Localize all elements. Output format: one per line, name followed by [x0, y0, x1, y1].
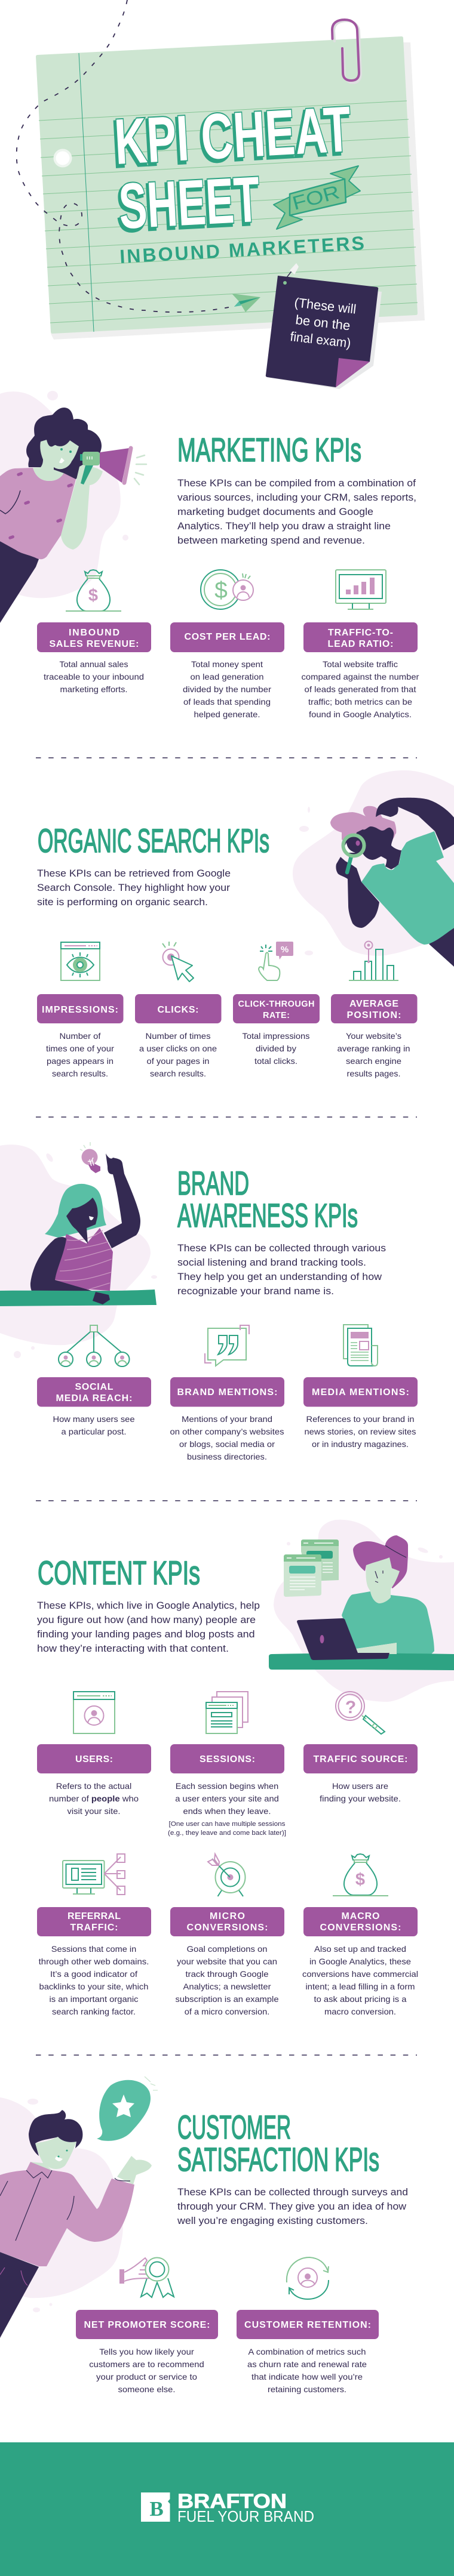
intro text: Analytics. They’ll help you draw a straight line	[177, 520, 391, 532]
description: Total impressions	[243, 1031, 309, 1041]
description: How users are	[332, 1781, 388, 1791]
label	[237, 2310, 379, 2339]
description: visit your site.	[67, 1806, 121, 1816]
description: A combination of metrics such	[249, 2347, 366, 2356]
label	[170, 622, 284, 652]
subtitle: INBOUND MARKETERS: INBOUND MARKETERS	[119, 232, 365, 267]
description: pages appears in	[47, 1056, 114, 1066]
description: a particular post.	[61, 1427, 127, 1436]
paper plane	[232, 294, 260, 312]
paper sheet	[36, 36, 418, 334]
intro text: you figure out how (and how many) people are	[37, 1614, 256, 1625]
intro text: between marketing spend and revenue.	[177, 535, 365, 546]
description: helped generate.	[194, 709, 260, 719]
description: is an important organic	[49, 1994, 139, 2004]
kpi: media mentions	[303, 1325, 418, 1449]
note text	[289, 295, 357, 351]
intro text	[37, 1600, 260, 1654]
intro text: These KPIs can be collected through various	[177, 1242, 386, 1254]
paper shadow	[51, 42, 425, 340]
description: Goal completions on	[186, 1944, 268, 1954]
label: TRAFFIC:	[70, 1923, 118, 1933]
label: SOCIAL	[75, 1382, 114, 1392]
label	[233, 994, 320, 1023]
description: total clicks.	[254, 1056, 297, 1066]
title: KPI CHEAT	[111, 92, 353, 180]
description: Your website’s	[346, 1031, 401, 1041]
description: customers are to recommend	[89, 2359, 204, 2369]
description: Total website traffic	[323, 659, 398, 669]
kpi: users	[37, 1692, 151, 1816]
icon: coin and person: $	[214, 578, 228, 603]
punched hole	[54, 149, 72, 167]
description: search ranking factor.	[52, 2007, 136, 2016]
icon: money bag: $	[355, 1870, 365, 1889]
heading	[177, 1164, 358, 1234]
icon: target with arrow	[208, 1854, 245, 1896]
description	[89, 2347, 204, 2394]
description: retaining customers.	[268, 2384, 346, 2394]
intro text: various sources, including your CRM, sales reports,	[177, 492, 416, 503]
description: ends when they leave.	[183, 1806, 271, 1816]
description	[46, 1031, 114, 1078]
label: COST PER LEAD:	[184, 632, 270, 642]
speech bubble with star	[97, 2077, 158, 2141]
paperclip	[332, 20, 361, 83]
intro text: These KPIs can be collected through surveys and	[177, 2186, 408, 2198]
label	[170, 1744, 284, 1773]
description: search engine	[346, 1056, 401, 1066]
description: compared against the number	[301, 672, 419, 681]
panel: organic search KPIs	[37, 770, 454, 1078]
kpi: sessions	[168, 1692, 286, 1837]
label: MICRO	[210, 1911, 245, 1921]
label	[303, 622, 418, 652]
icon: money bag	[66, 570, 121, 611]
intro text: These KPIs can be compiled from a combination of	[177, 477, 416, 489]
ribbon: FOR	[274, 166, 360, 229]
description: Also set up and tracked	[314, 1944, 406, 1954]
kpi: impressions	[37, 942, 123, 1078]
description	[176, 1944, 279, 2016]
description: subscription is an example	[176, 1994, 279, 2004]
illustration: woman raising hand with light bulb	[0, 1142, 157, 1358]
icon: newspaper	[343, 1325, 378, 1366]
footer	[0, 2442, 454, 2576]
intro text: They help you get an understanding of how	[177, 1271, 382, 1282]
sticky note	[266, 263, 382, 389]
description: through other web domains.	[39, 1957, 149, 1966]
intro text	[37, 868, 231, 908]
icon: user with circular arrows	[287, 2257, 329, 2299]
kpi: brand mentions	[170, 1325, 284, 1461]
intro text: finding your landing pages and blog posts and	[37, 1628, 254, 1640]
description: found in Google Analytics.	[309, 709, 412, 719]
icon: browser with user	[73, 1692, 115, 1733]
description: It’s a good indicator of	[50, 1969, 137, 1979]
description: backlinks to your site, which	[39, 1982, 148, 1991]
kpi: traffic-to-lead ratio	[301, 570, 419, 719]
description: on lead generation	[190, 672, 264, 681]
title: SHEET: SHEET	[117, 163, 262, 242]
kpi: customer retention	[237, 2257, 379, 2394]
description: divided by	[256, 1044, 296, 1053]
label: SALES REVENUE:	[49, 639, 139, 649]
description	[302, 1944, 418, 2016]
description: search results.	[150, 1069, 206, 1078]
description: traffic; both metrics can be	[308, 697, 412, 707]
description: of leads generated from that	[305, 684, 416, 694]
description: marketing efforts.	[60, 684, 128, 694]
description: to ask about pricing is a	[314, 1994, 407, 2004]
intro text: site is performing on organic search.	[37, 896, 208, 908]
kpi: traffic source	[303, 1692, 418, 1803]
kpi: micro conversions	[170, 1854, 284, 2016]
description: or in industry magazines.	[312, 1439, 409, 1449]
heading	[177, 2108, 379, 2178]
description: Mentions of your brand	[182, 1414, 272, 1424]
panel: brand awareness KPIs	[0, 1142, 418, 1461]
description	[175, 1781, 279, 1816]
description: a user enters your site and	[175, 1794, 279, 1803]
description	[247, 2347, 367, 2394]
title: SHEET: SHEET	[115, 165, 260, 245]
illustration: woman with megaphone	[0, 391, 146, 623]
intro text	[177, 1242, 386, 1297]
description	[170, 1414, 284, 1461]
description: How many users see	[53, 1414, 135, 1424]
description: as churn rate and renewal rate	[247, 2359, 367, 2369]
description	[301, 659, 419, 719]
intro text	[177, 2186, 408, 2226]
label	[303, 1377, 418, 1407]
description: Analytics; a newsletter	[183, 1982, 271, 1991]
description: References to your brand in	[306, 1414, 415, 1424]
heading: ORGANIC SEARCH KPIs	[38, 822, 269, 859]
label: CLICK-THROUGH	[238, 999, 314, 1009]
intro text: how they’re interacting with that content.	[37, 1643, 229, 1654]
note text: final exam)	[289, 329, 352, 351]
description: traceable to your inbound	[44, 672, 144, 681]
kpi: net promoter score	[76, 2258, 218, 2394]
intro text	[177, 477, 416, 546]
intro text: These KPIs can be retrieved from Google	[37, 868, 231, 879]
description	[320, 1781, 401, 1803]
icon: network of users	[59, 1325, 129, 1366]
kpi: click-through rate	[233, 942, 320, 1066]
label	[37, 622, 151, 652]
heading: MARKETING KPIs	[177, 431, 361, 468]
intro text: social listening and brand tracking tools.	[177, 1257, 366, 1268]
label: REFERRAL	[68, 1911, 121, 1921]
description	[337, 1031, 410, 1078]
wordmark: FUEL YOUR BRAND	[177, 2507, 314, 2525]
description: number of people who	[49, 1794, 139, 1803]
description	[39, 1944, 149, 2016]
description: or blogs, social media or	[179, 1439, 275, 1449]
description: Number of	[60, 1031, 101, 1041]
illustration: woman at laptop	[269, 1520, 454, 1702]
label: CONVERSIONS:	[186, 1923, 268, 1933]
ruled lines	[39, 101, 418, 323]
description	[305, 1414, 416, 1449]
panel: hero notebook paper	[17, 0, 425, 389]
intro text: through your CRM. They give you an idea of how	[177, 2201, 407, 2212]
kpi: macro conversions	[302, 1854, 418, 2016]
description: macro conversion.	[324, 2007, 396, 2016]
icon: stacked pages	[206, 1692, 248, 1733]
description: Refers to the actual	[56, 1781, 131, 1791]
pin	[283, 263, 299, 285]
intro text: recognizable your brand name is.	[177, 1285, 334, 1297]
illustration: person with magnifying glass	[293, 770, 454, 967]
description: results pages.	[346, 1069, 400, 1078]
description: someone else.	[118, 2384, 176, 2394]
heading: CONTENT KPIs	[38, 1554, 200, 1591]
label	[37, 1907, 151, 1936]
label: TRAFFIC SOURCE:	[313, 1754, 407, 1764]
label: BRAND MENTIONS:	[177, 1387, 277, 1397]
label: RATE:	[263, 1011, 290, 1020]
description: Total annual sales	[60, 659, 128, 669]
description: conversions have commercial	[302, 1969, 418, 1979]
panel: marketing KPIs	[0, 391, 419, 719]
description: of your pages in	[147, 1056, 209, 1066]
wordmark: BRAFTON	[177, 2490, 287, 2513]
label: AVERAGE	[349, 999, 398, 1009]
description: of a micro conversion.	[185, 2007, 269, 2016]
note text: be on the	[295, 312, 351, 333]
intro text: well you’re engaging existing customers.	[177, 2215, 368, 2226]
label	[76, 2310, 218, 2339]
icon: money bag: $	[88, 586, 98, 605]
icon: bar chart with pin	[349, 942, 398, 980]
panel: content KPIs	[37, 1520, 454, 2016]
description: Sessions that come in	[51, 1944, 136, 1954]
description: search results.	[52, 1069, 108, 1078]
description	[53, 1414, 135, 1436]
kpi: social media reach	[37, 1325, 151, 1436]
dashed flight path	[17, 0, 229, 312]
description	[183, 659, 271, 719]
kpi: inbound sales revenue	[37, 570, 151, 694]
heading: CUSTOMER	[177, 2108, 291, 2146]
description: a user clicks on one	[139, 1044, 217, 1053]
label: USERS:	[75, 1754, 113, 1764]
label: INBOUND	[69, 628, 119, 638]
label: LEAD RATIO:	[327, 639, 393, 649]
icon: hand holding medal ribbon	[119, 2258, 174, 2297]
description: in Google Analytics, these	[309, 1957, 411, 1966]
label: MACRO	[342, 1911, 380, 1921]
icon: monitor with bars	[336, 570, 386, 609]
label: POSITION:	[346, 1010, 401, 1020]
description: your website that you can	[177, 1957, 277, 1966]
label: MEDIA REACH:	[56, 1393, 133, 1403]
label: CONVERSIONS:	[320, 1923, 401, 1933]
label	[37, 994, 123, 1023]
intro text: Search Console. They highlight how your	[37, 882, 230, 893]
description: Total money spent	[191, 659, 263, 669]
label: SESSIONS:	[200, 1754, 255, 1764]
icon: coin and person	[201, 570, 253, 609]
web pages	[284, 1540, 339, 1597]
description: times one of your	[46, 1044, 114, 1053]
label: CUSTOMER RETENTION:	[244, 2320, 371, 2330]
icon: magnifying glass with question mark	[336, 1692, 385, 1734]
kpi: clicks	[135, 942, 221, 1078]
description	[139, 1031, 217, 1078]
description	[49, 1781, 139, 1816]
label	[303, 1744, 418, 1773]
label: TRAFFIC-TO-	[328, 628, 393, 638]
margin line	[79, 53, 94, 332]
label: MEDIA MENTIONS:	[312, 1387, 409, 1397]
label: NET PROMOTER SCORE:	[84, 2320, 210, 2330]
description: track through Google	[185, 1969, 269, 1979]
description: that indicate how well you’re	[251, 2372, 363, 2381]
kpi: referral traffic	[37, 1854, 151, 2016]
description: Tells you how likely your	[99, 2347, 194, 2356]
icon: monitor linking to squares	[63, 1854, 125, 1895]
illustration: man with star speech bubble	[0, 2077, 158, 2338]
description: average ranking in	[337, 1044, 410, 1053]
description: your product or service to	[96, 2372, 197, 2381]
icon: quote bubble	[205, 1325, 249, 1366]
icon: pointing hand with percent: %	[281, 945, 289, 955]
label	[303, 1907, 418, 1936]
footnote: [One user can have multiple sessions	[168, 1821, 286, 1828]
title: KPI CHEAT: KPI CHEAT	[113, 92, 353, 178]
label	[37, 1744, 151, 1773]
description: finding your website.	[320, 1794, 401, 1803]
note text: (These will	[293, 295, 357, 317]
icon: Brafton logo mark: B	[149, 2497, 164, 2521]
icon: money bag	[333, 1854, 388, 1896]
description: business directories.	[187, 1452, 267, 1461]
description: of leads that spending	[183, 697, 271, 707]
kpi: cost per lead	[170, 570, 284, 719]
icon: pointing hand with percent	[259, 942, 293, 980]
kpi: average position	[331, 942, 417, 1078]
label	[331, 994, 417, 1023]
footnote: (e.g., they leave and come back later)]	[168, 1830, 286, 1837]
icon: cursor	[162, 942, 194, 982]
icon: Brafton logo mark	[141, 2492, 170, 2522]
intro text: These KPIs, which live in Google Analytics, help	[37, 1600, 260, 1611]
description: Each session begins when	[176, 1781, 278, 1791]
label: CLICKS:	[158, 1005, 198, 1015]
heading: BRAND	[177, 1164, 249, 1202]
label	[37, 1377, 151, 1407]
wordmark	[177, 2490, 314, 2525]
ribbon: FOR: FOR	[290, 181, 342, 214]
icon: browser with eye	[61, 942, 100, 980]
description	[44, 659, 144, 694]
title: SHEET	[115, 163, 262, 245]
label: IMPRESSIONS:	[42, 1005, 118, 1015]
intro text: marketing budget documents and Google	[177, 506, 373, 517]
description	[243, 1031, 309, 1066]
label	[170, 1377, 284, 1407]
label	[135, 994, 221, 1023]
description: divided by the number	[183, 684, 271, 694]
label	[170, 1907, 284, 1936]
icon: magnifying glass with question mark: ?	[345, 1698, 356, 1717]
description: Number of times	[146, 1031, 210, 1041]
panel: customer satisfaction KPIs	[0, 2077, 408, 2394]
description: on other company’s websites	[170, 1427, 284, 1436]
description: intent; a lead filling in a form	[306, 1982, 415, 1991]
description: news stories, on review sites	[305, 1427, 416, 1436]
footnote	[168, 1821, 286, 1837]
title: KPI CHEAT: KPI CHEAT	[111, 95, 351, 180]
